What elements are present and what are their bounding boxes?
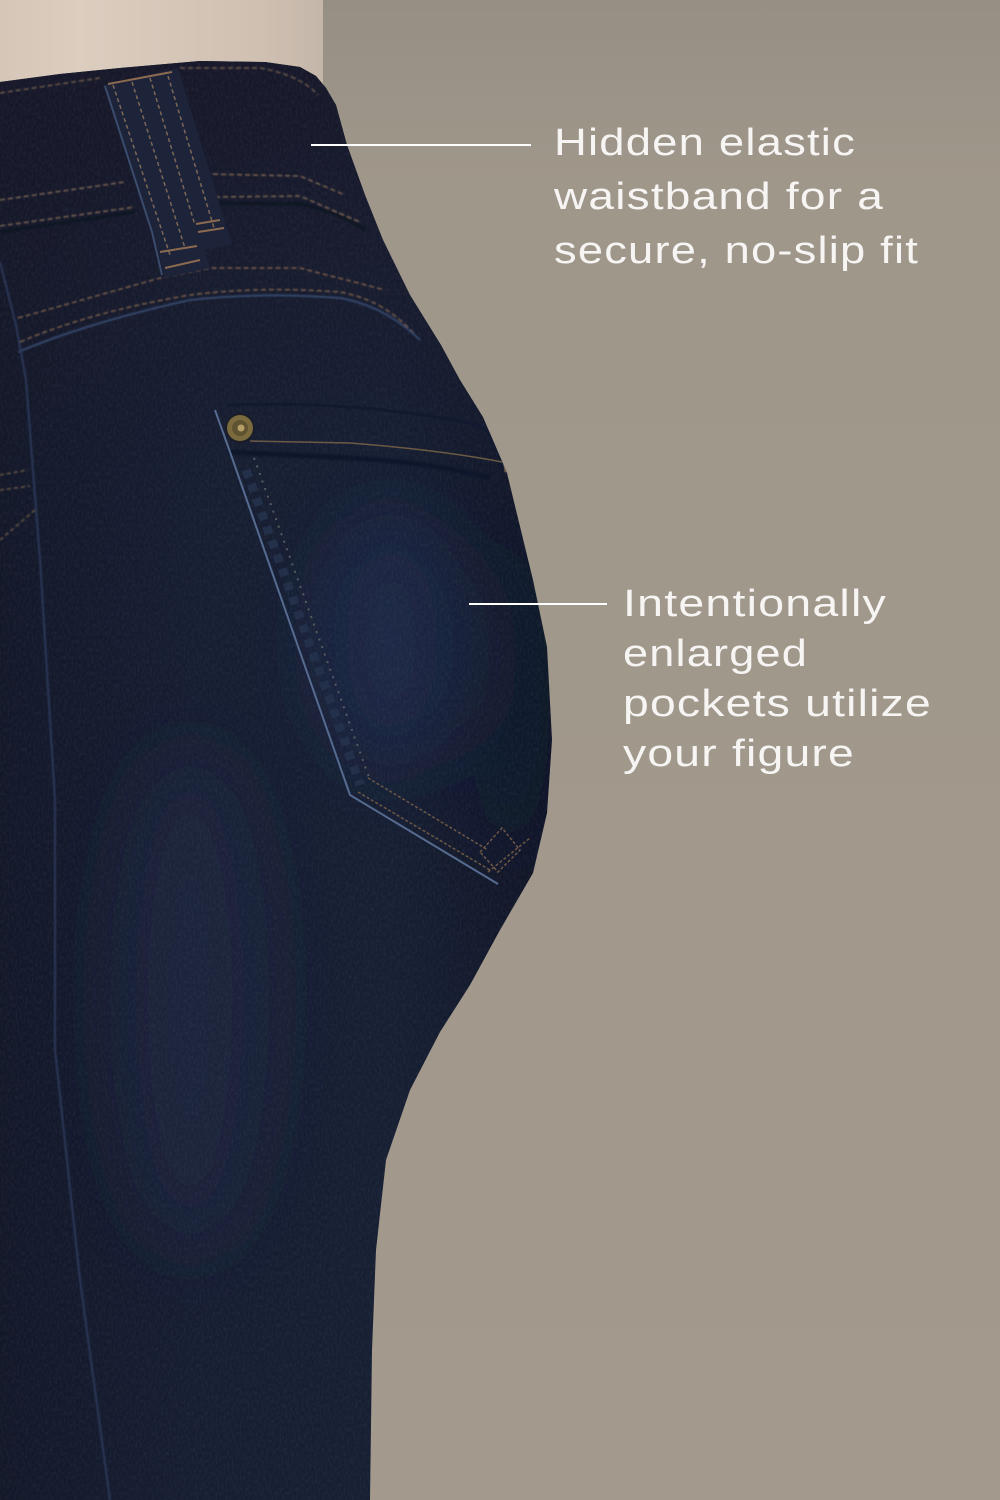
text: pockets: pockets utilize	[623, 683, 932, 725]
text: waistband	[553, 122, 919, 272]
callout: pockets	[469, 583, 932, 775]
text: pockets: enlarged	[623, 633, 808, 675]
pocket rivet	[225, 413, 255, 443]
mannequin torso	[0, 0, 323, 100]
text: pockets	[623, 583, 932, 775]
back pocket	[215, 404, 530, 884]
text: pockets: your figure	[623, 733, 855, 775]
belt loop	[103, 68, 232, 278]
text: pockets: Intentionally	[623, 583, 887, 625]
leader line: pockets	[469, 603, 607, 605]
callout: waistband	[311, 122, 919, 272]
denim fading	[130, 520, 488, 1206]
jeans	[0, 50, 560, 1500]
leader line: waistband	[311, 144, 531, 146]
denim grain	[0, 50, 560, 1500]
text: waistband: waistband for a	[553, 176, 884, 218]
text: waistband: Hidden elastic	[554, 122, 856, 164]
waistband stitching	[0, 68, 420, 1500]
text: waistband: secure, no-slip fit	[554, 230, 919, 272]
